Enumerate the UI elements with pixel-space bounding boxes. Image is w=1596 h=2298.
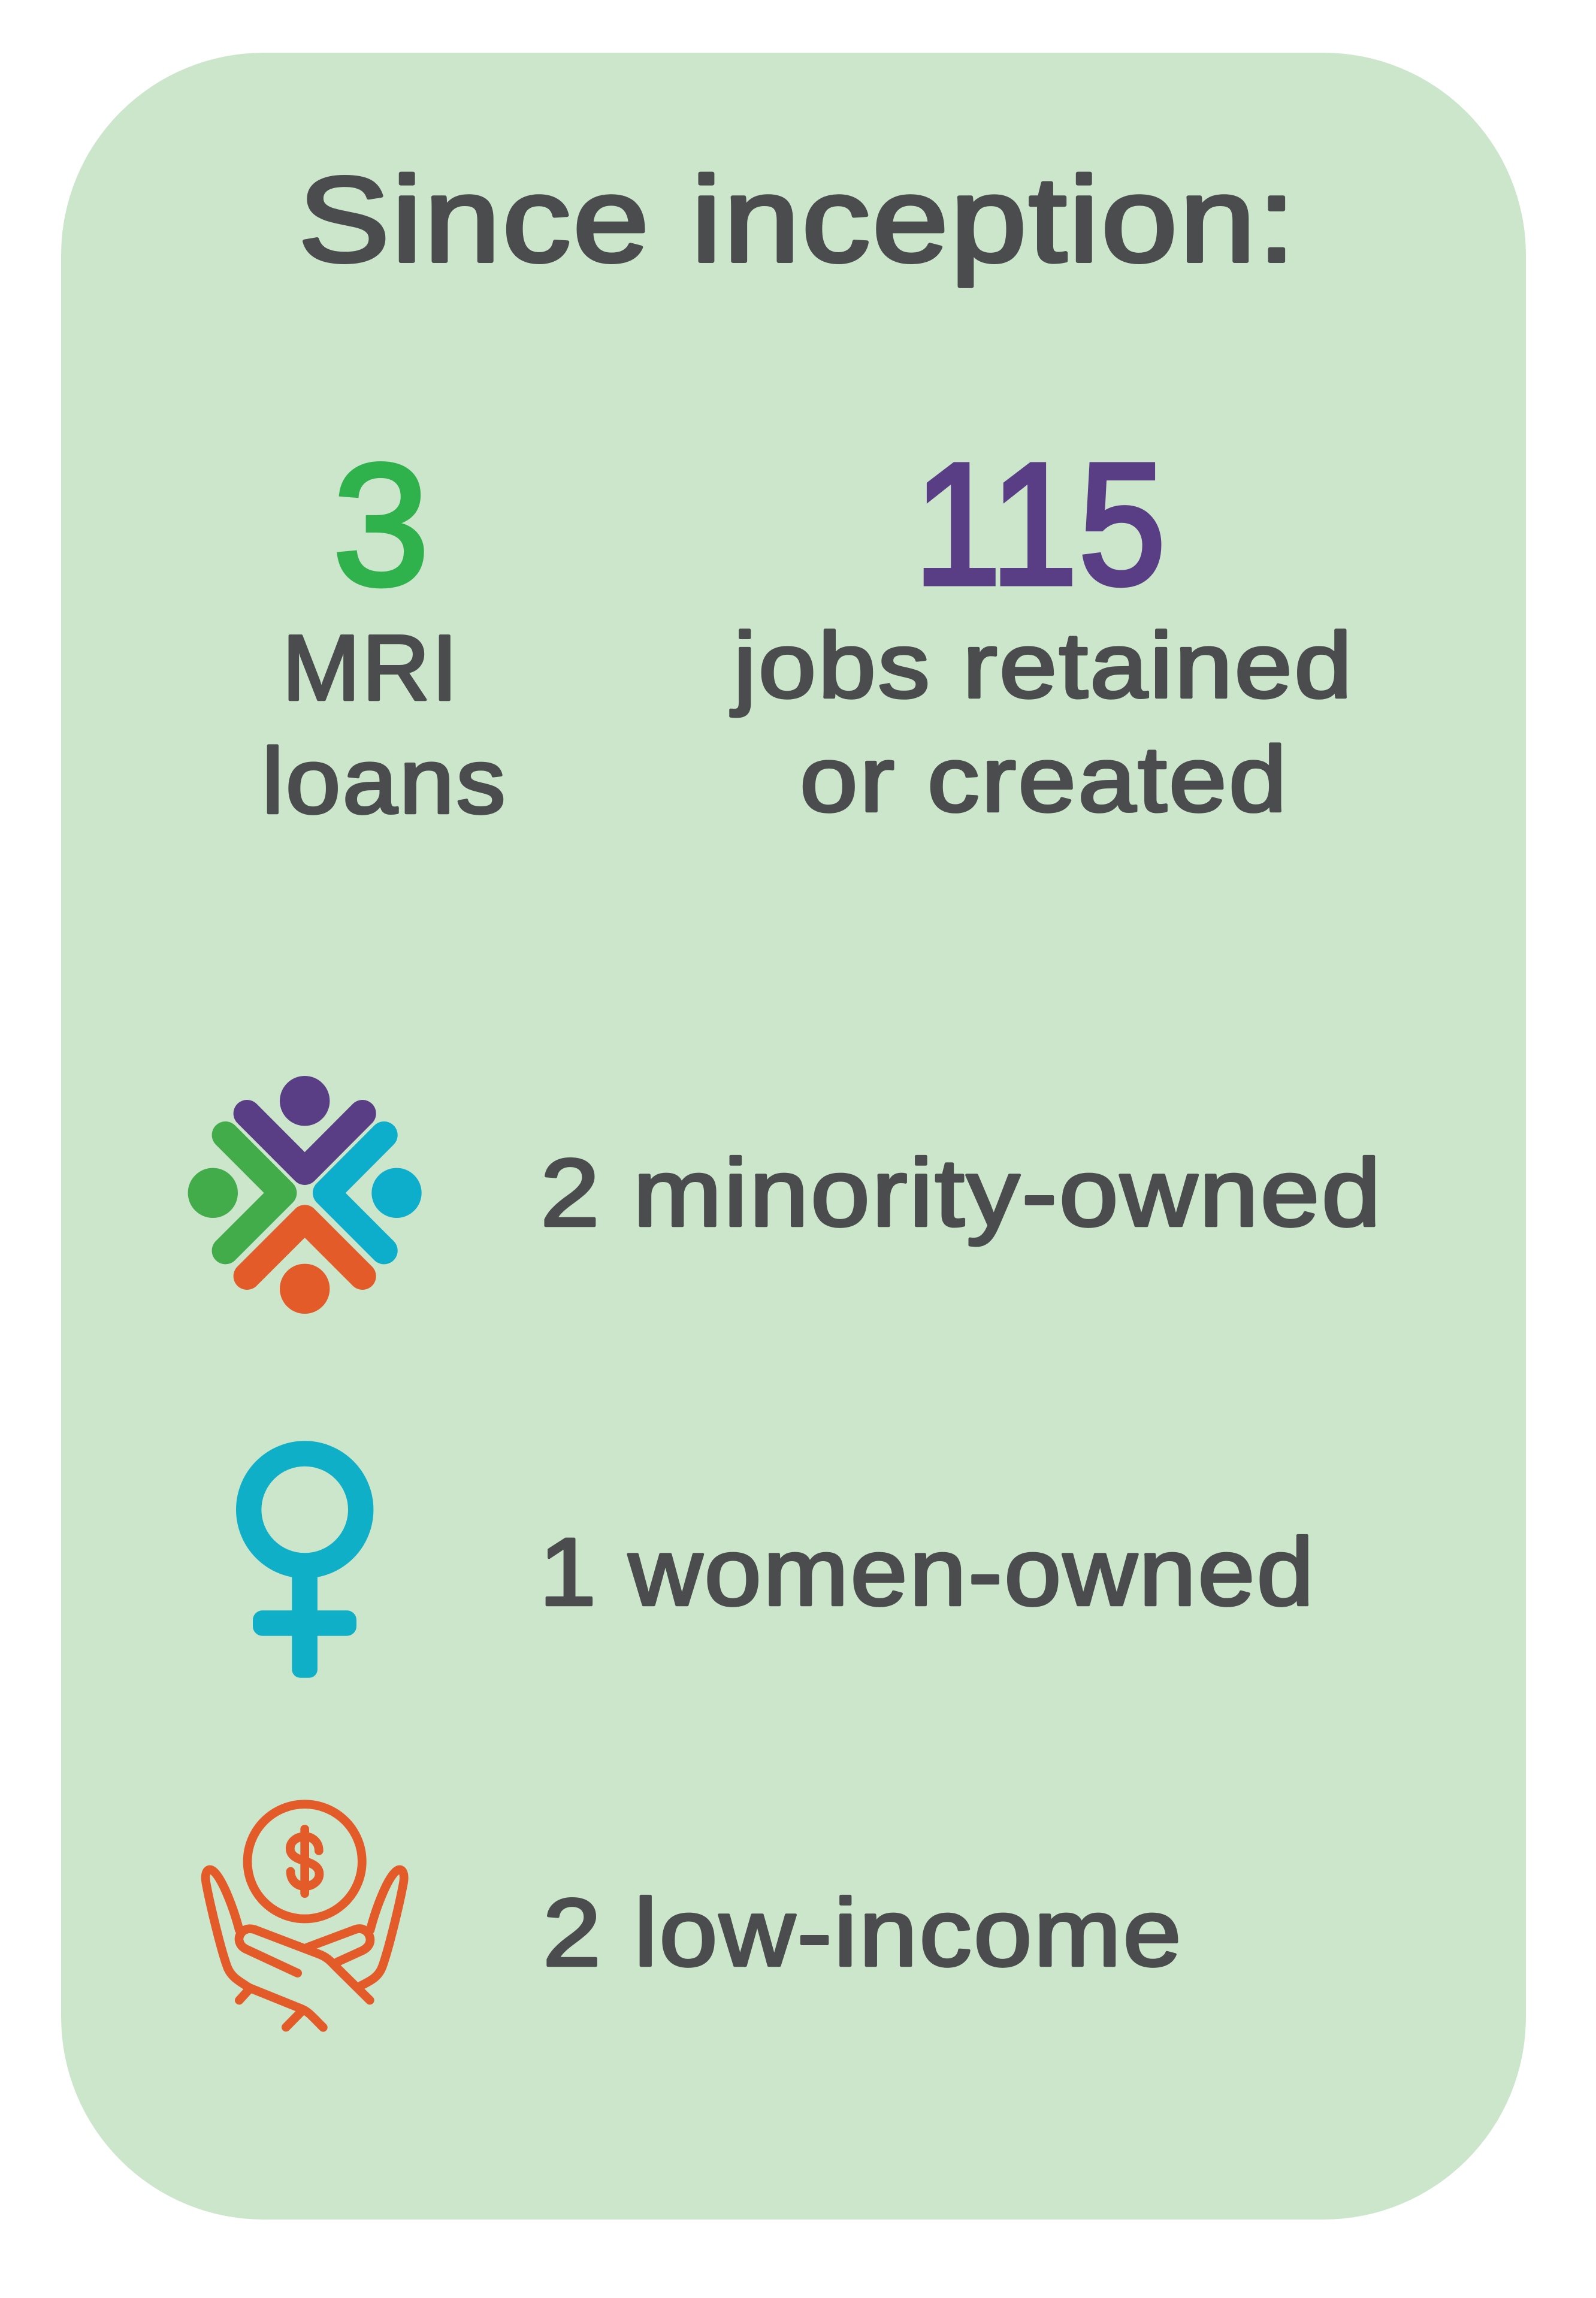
stat: 3 MRI loans (262, 428, 507, 833)
label: loans: loans (262, 729, 507, 833)
icon: female symbol women-owned (249, 1453, 361, 1678)
text: 1 women-owned: 1 women-owned (539, 1518, 1316, 1625)
text: 2 low-income: 2 low-income (543, 1879, 1183, 1986)
number: 115: 115 (914, 428, 1167, 621)
label: jobs retained: jobs retained (731, 613, 1354, 717)
number: 3: 3 (332, 428, 431, 622)
icon: four people minority-owned (188, 1076, 422, 1314)
label: MRI: MRI (282, 616, 460, 719)
label: or created: or created (800, 727, 1289, 831)
stat: 115 jobs (731, 428, 1354, 831)
icon: hands holding dollar coin low-income (205, 1804, 404, 2027)
title: Since inception: (298, 152, 1298, 287)
text: 2 minority-owned: 2 minority-owned (540, 1139, 1383, 1246)
